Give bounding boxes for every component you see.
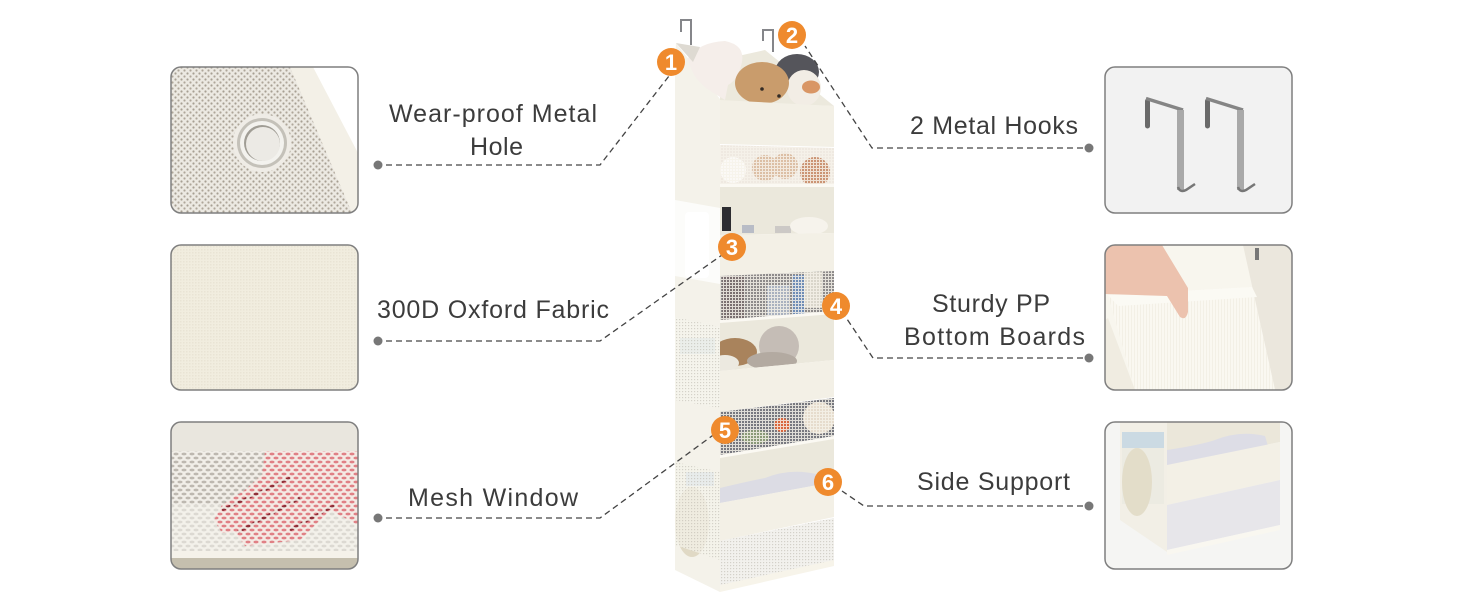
front panel 2 bbox=[720, 233, 834, 276]
badge 5 bbox=[711, 416, 739, 444]
badge 3 bbox=[718, 233, 746, 261]
shelf lips bbox=[720, 184, 834, 592]
label: Wear-proof Metal Hole: Hole bbox=[470, 133, 523, 161]
front panel 3 bbox=[720, 360, 834, 412]
frame: side support photo bbox=[1105, 422, 1292, 569]
mesh pocket 3 bbox=[720, 398, 835, 456]
compartment 2 interior bbox=[720, 186, 834, 236]
side panel bbox=[675, 43, 720, 592]
label: Sturdy PP Bottom Boards bbox=[904, 290, 1085, 351]
badge 3: 3 bbox=[726, 235, 738, 260]
badge 1 bbox=[657, 48, 685, 76]
label: 2 Metal Hooks: 2 Metal Hooks bbox=[910, 112, 1078, 140]
leader line 4 bbox=[845, 316, 1094, 362]
mesh pocket 4 bbox=[720, 518, 834, 586]
side mesh pockets bbox=[675, 200, 720, 560]
front panel 4 bbox=[720, 482, 834, 541]
compartment 4 interior bbox=[720, 438, 834, 505]
badge 5: 5 bbox=[719, 418, 731, 443]
badge 2 bbox=[778, 21, 806, 49]
label: Wear-proof Metal Hole: Wear-proof Metal bbox=[389, 100, 597, 128]
mesh pocket 1 bbox=[720, 145, 834, 187]
label: Wear-proof Metal Hole bbox=[389, 100, 597, 161]
top compartment back bbox=[720, 50, 834, 106]
badge 2: 2 bbox=[786, 23, 798, 48]
mesh pocket 2 bbox=[720, 271, 834, 321]
label: Sturdy PP Bottom Boards: Sturdy PP bbox=[932, 290, 1050, 318]
leader line 1 bbox=[374, 76, 669, 170]
frame: metal hole photo bbox=[171, 67, 358, 213]
photo: bottom board held by hand bbox=[1105, 245, 1292, 390]
frame: board photo bbox=[1105, 245, 1292, 390]
frame: fabric photo bbox=[171, 245, 358, 390]
photo: side support close-up bbox=[1105, 422, 1292, 569]
leader line 5 bbox=[374, 433, 716, 522]
photo: hand behind mesh window bbox=[171, 422, 358, 569]
leader line 2 bbox=[805, 46, 1094, 152]
metal hooks on organizer bbox=[681, 20, 773, 52]
front panel 1 bbox=[720, 100, 834, 147]
photo: two metal hooks bbox=[1105, 67, 1292, 213]
badge 6 bbox=[814, 468, 842, 496]
label: Side Support: Side Support bbox=[917, 468, 1070, 496]
badge 4: 4 bbox=[830, 294, 843, 319]
organizer product bbox=[675, 20, 835, 592]
badge 4 bbox=[822, 292, 850, 320]
photo: metal eyelet hole on fabric bbox=[171, 67, 358, 213]
leader line 3 bbox=[374, 255, 722, 346]
photo: oxford fabric texture bbox=[171, 245, 358, 390]
badge 6: 6 bbox=[822, 470, 834, 495]
leader line 6 bbox=[842, 491, 1094, 510]
badge 1: 1 bbox=[665, 50, 677, 75]
label: Mesh Window: Mesh Window bbox=[408, 484, 579, 512]
label: 300D Oxford Fabric: 300D Oxford Fabric bbox=[377, 296, 609, 324]
label: Sturdy PP Bottom Boards: Bottom Boards bbox=[904, 323, 1085, 351]
frame: mesh photo bbox=[171, 422, 358, 569]
compartment 3 interior bbox=[720, 314, 834, 371]
stuffed toys bbox=[676, 41, 821, 106]
